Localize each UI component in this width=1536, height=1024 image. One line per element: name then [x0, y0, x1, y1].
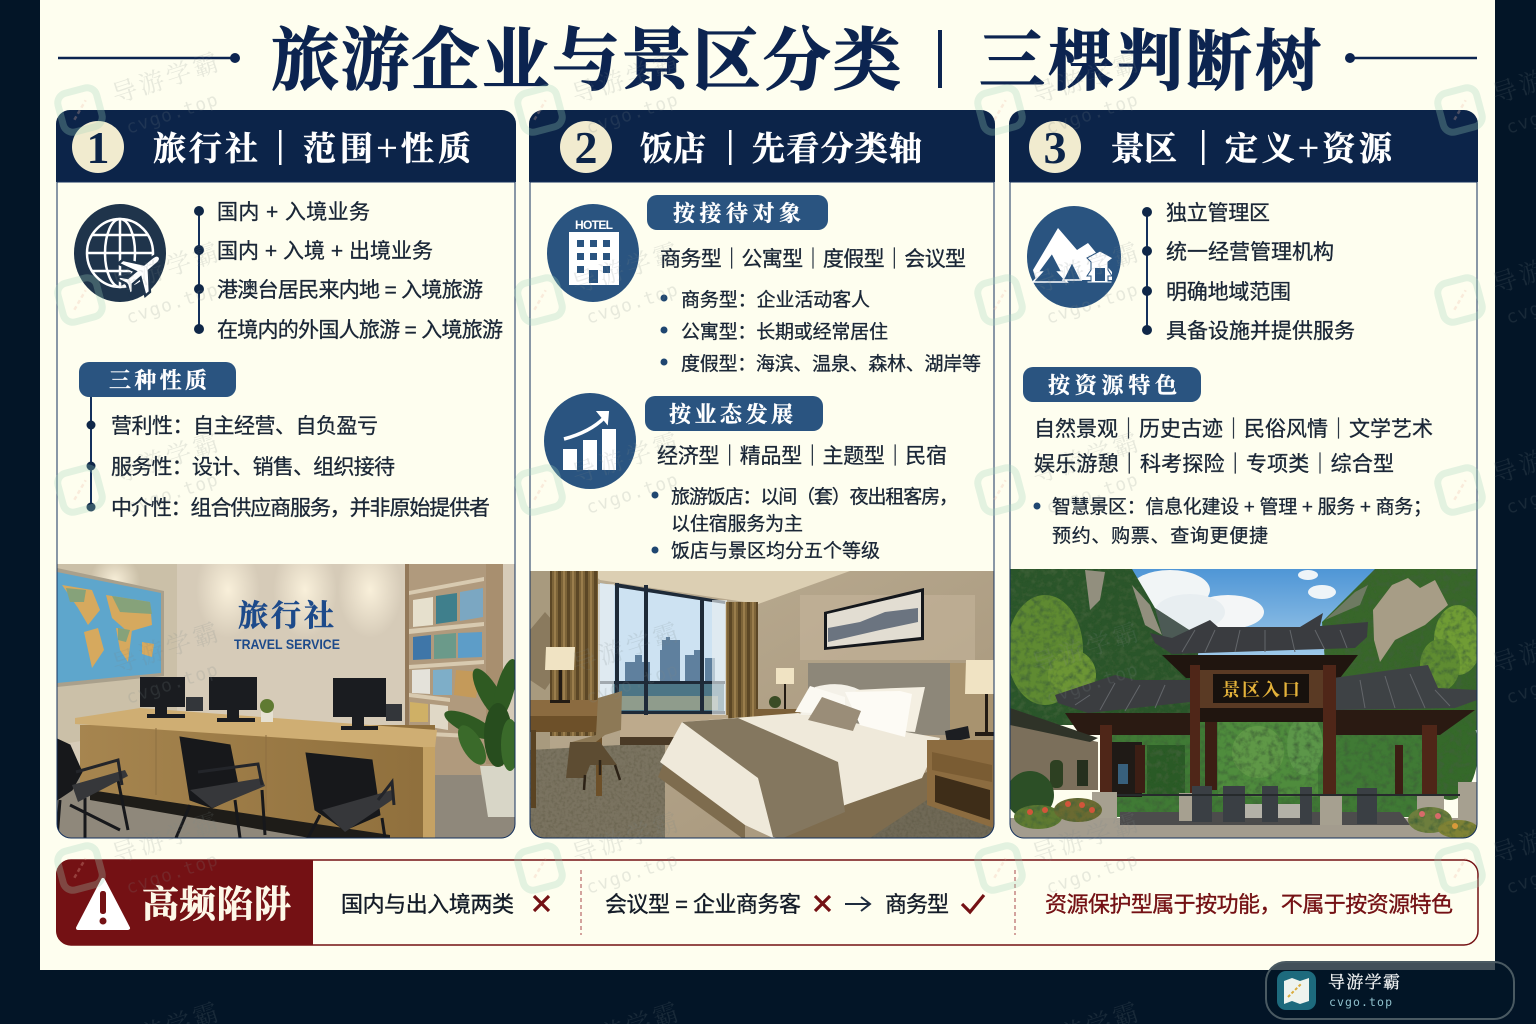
sign: travel service: TRAVEL SERVICE [234, 636, 340, 652]
list: definition: 独立管理区 [1166, 202, 1270, 225]
pill: by resource [1023, 367, 1201, 402]
panel header: travel agency: 范围+性质 [303, 123, 471, 170]
title [58, 7, 1477, 104]
smart scenic note: 智慧景区：信息化建设 + 管理 + 服务 + 商务； [1052, 496, 1432, 518]
panel header: hotel [529, 110, 995, 182]
list: guest types: 商务型：企业活动客人 [681, 289, 870, 311]
list: guest types: 度假型：海滨、温泉、森林、湖岸等 [681, 353, 981, 375]
watermarks: 导游学霸 [567, 613, 683, 681]
watermarks: 导游学霸 [107, 613, 223, 681]
list: guest types: 公寓型：长期或经常居住 [681, 321, 888, 343]
list: format notes: 旅游饭店：以间（套）夜出租客房， [671, 486, 958, 508]
brand text: 导游学霸 [1328, 968, 1400, 993]
watermarks: cvgo.top [124, 849, 220, 899]
watermarks: 导游学霸 [567, 423, 683, 491]
panel: travel agency [56, 110, 522, 838]
list: natures: 中介性：组合供应商服务，并非原始提供者 [111, 497, 490, 520]
resource types: 自然景观｜历史古迹｜民俗风情｜文学艺术 [1034, 418, 1433, 441]
watermarks: cvgo.top [584, 849, 680, 899]
icon: mountains and pavilion [1027, 206, 1121, 308]
pill: by guest [647, 195, 828, 230]
panel header: scenic area: 3 [1044, 122, 1066, 173]
panel: scenic area [1006, 110, 1482, 838]
panel header: scenic area: 景区 [1111, 123, 1177, 170]
watermarks: cvgo.top [1044, 659, 1140, 709]
watermarks: 导游学霸 [1027, 233, 1143, 301]
panel header: hotel: 2 [574, 122, 598, 173]
panel: frequent traps [56, 860, 1478, 945]
watermarks: 导游学霸 [107, 233, 223, 301]
pill: by guest: 按接待对象 [673, 197, 801, 228]
watermarks: 导游学霸 [1027, 613, 1143, 681]
watermarks: 导游学霸 [1027, 803, 1143, 871]
icon: brand map [1277, 971, 1316, 1010]
smart scenic note [1034, 496, 1432, 547]
watermarks: 导游学霸 [1027, 423, 1143, 491]
watermarks: 导游学霸 [567, 803, 683, 871]
watermarks: cvgo.top [124, 89, 220, 139]
list: natures [86, 397, 490, 520]
list: scope: 港澳台居民来内地 = 入境旅游 [217, 279, 483, 302]
watermarks: cvgo.top [1044, 469, 1140, 519]
pill: by development [645, 396, 823, 431]
photo: scenic gate [1006, 569, 1482, 838]
panel header: scenic area: 定义+资源 [1225, 123, 1394, 170]
list: natures: 营利性：自主经营、自负盈亏 [111, 415, 378, 438]
pill: three natures: 三种性质 [109, 364, 207, 395]
icon: hotel building [547, 204, 639, 302]
watermarks: cvgo.top [124, 469, 220, 519]
title: 旅游企业与景区分类 [271, 7, 901, 104]
icon: globe and plane [74, 204, 173, 303]
photo: travel agency office [57, 542, 522, 838]
hotel types by guest: 商务型｜公寓型｜度假型｜会议型 [660, 248, 966, 271]
list: scope: 国内 + 入境 + 出境业务 [217, 240, 433, 263]
list: definition: 具备设施并提供服务 [1166, 320, 1355, 343]
list: natures: 服务性：设计、销售、组织接待 [111, 456, 395, 479]
hotel types by format: 经济型｜精品型｜主题型｜民宿 [657, 445, 947, 468]
smart scenic note: 预约、购票、查询更便捷 [1052, 525, 1268, 547]
list: format notes [652, 486, 958, 562]
panel: hotel [529, 110, 995, 838]
watermarks: cvgo.top [584, 659, 680, 709]
trap label: 高频陷阱 [142, 874, 291, 928]
trap label [56, 860, 313, 945]
sign: travel service: 旅行社 [238, 591, 334, 635]
list: scope: 在境内的外国人旅游 = 入境旅游 [217, 319, 503, 342]
list: scope: 国内 + 入境业务 [217, 201, 370, 224]
list: definition [1142, 202, 1355, 343]
panel header: hotel: 先看分类轴 [752, 123, 922, 170]
brand badge [1266, 962, 1514, 1019]
watermarks: cvgo.top [584, 469, 680, 519]
trap 2 [605, 892, 984, 917]
watermarks: 导游学霸 [107, 423, 223, 491]
watermarks: cvgo.top [1044, 279, 1140, 329]
list: format notes: 饭店与景区均分五个等级 [671, 540, 880, 562]
list: definition: 统一经营管理机构 [1166, 241, 1334, 264]
watermarks: 导游学霸 [567, 43, 683, 111]
watermarks: cvgo.top [124, 279, 220, 329]
resource types [1034, 418, 1433, 476]
list: guest types [660, 289, 981, 375]
trap 2: 会议型 = 企业商务客 [605, 892, 801, 917]
watermarks: 导游学霸 [107, 803, 223, 871]
photo: hotel room [530, 571, 994, 838]
watermark icons [56, 86, 1484, 892]
watermarks: cvgo.top [1044, 849, 1140, 899]
watermarks: cvgo.top [1044, 89, 1140, 139]
panel header: travel agency: 旅行社 [153, 123, 258, 170]
pill: three natures [79, 362, 236, 397]
panel header: travel agency: 1 [86, 122, 110, 173]
pill: by development: 按业态发展 [669, 398, 793, 429]
trap 2: 商务型 [885, 892, 949, 917]
resource types: 娱乐游憩｜科考探险｜专项类｜综合型 [1034, 453, 1394, 476]
watermarks: cvgo.top [584, 279, 680, 329]
brand text: cvgo.top [1329, 995, 1392, 1009]
watermarks: cvgo.top [124, 659, 220, 709]
trap 3: 资源保护型属于按功能，不属于按资源特色 [1045, 892, 1453, 917]
watermarks: cvgo.top [584, 89, 680, 139]
list: definition: 明确地域范围 [1166, 281, 1291, 304]
pill: by resource: 按资源特色 [1048, 369, 1177, 400]
watermarks: 导游学霸 [107, 43, 223, 111]
watermarks: 导游学霸 [1027, 43, 1143, 111]
photo: scenic gate: 景区入口 [1222, 676, 1300, 702]
list: scope [194, 201, 503, 342]
icon: growth chart [544, 393, 636, 489]
list: format notes: 以住宿服务为主 [671, 513, 803, 535]
watermarks: 导游学霸 [567, 233, 683, 301]
trap 1: 国内与出入境两类 [341, 892, 514, 917]
panel header: travel agency [56, 110, 516, 182]
title: 三棵判断树 [979, 8, 1321, 103]
icon: hotel building: HOTEL [575, 218, 613, 232]
panel header: hotel: 饭店 [640, 123, 706, 170]
brand text [1328, 968, 1400, 1009]
sign: travel service [234, 600, 340, 649]
panel header: scenic area [1009, 110, 1478, 182]
